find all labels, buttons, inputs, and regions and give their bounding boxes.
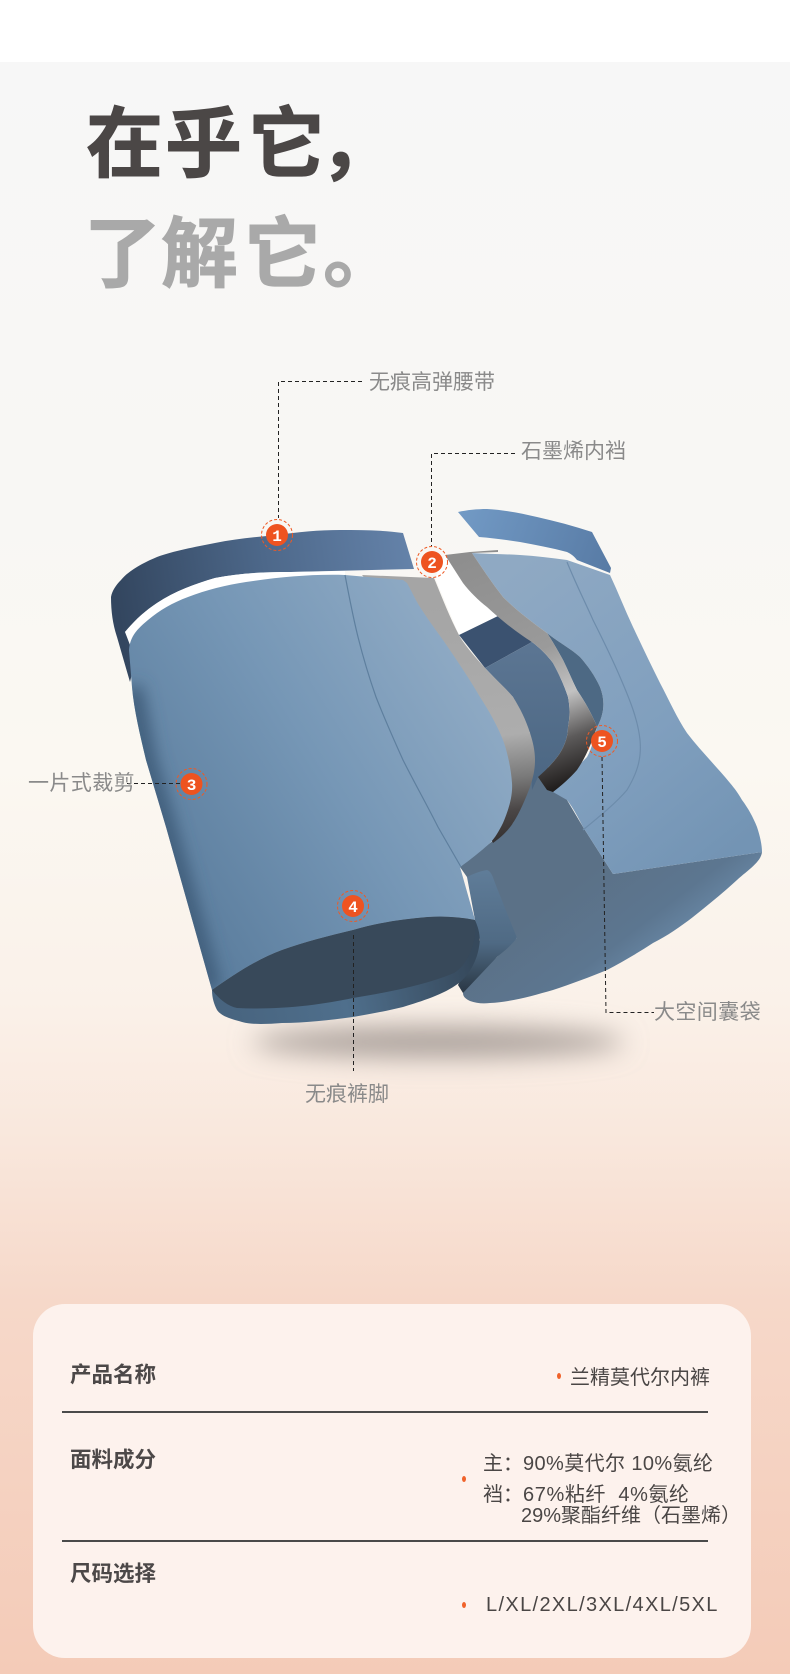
spec value: product name: 兰精莫代尔内裤 — [570, 1367, 710, 1389]
rear crotch panel — [460, 765, 762, 1003]
badge 5 — [586, 726, 618, 756]
spec label: fabric: 面料成分 — [70, 1448, 156, 1472]
callout: waistband: 无痕高弹腰带 — [369, 371, 495, 394]
callout: pouch: 大空间囊袋 — [654, 1001, 761, 1024]
panel: product specs — [33, 1304, 751, 1658]
white gap behind gusset — [435, 555, 498, 635]
badge 3 — [176, 768, 207, 800]
leg opening — [212, 917, 480, 1024]
front panel seam — [345, 575, 461, 867]
badge 1: 1 — [272, 528, 282, 546]
badge 2: 2 — [427, 555, 437, 573]
front panel — [129, 575, 512, 990]
grey lining strip — [362, 575, 535, 843]
spec value: gusset fabric: 裆：67%粘纤 4%氨纶 — [483, 1484, 690, 1506]
leader line: gusset — [432, 454, 515, 546]
gusset flap — [458, 870, 517, 993]
ground shadow — [252, 1026, 624, 1058]
rear waistband — [458, 509, 611, 573]
bullet — [462, 1476, 466, 1482]
inner pouch right section — [547, 633, 603, 727]
badge 4: 4 — [348, 899, 358, 917]
rear panel — [472, 553, 762, 874]
spec label: sizes: 尺码选择 — [70, 1562, 156, 1586]
leader line: pouch — [602, 757, 654, 1012]
callout: gusset: 石墨烯内裆 — [521, 440, 626, 463]
product diagram: boxer briefs exploded view — [111, 381, 762, 1074]
title: line two: 了解它。 — [84, 212, 400, 298]
callout: leg opening: 无痕裤脚 — [305, 1083, 389, 1106]
rear panel seam — [567, 562, 640, 830]
title: line one: 在乎它， — [86, 102, 396, 188]
bullet — [557, 1373, 561, 1379]
inner pouch panel — [485, 642, 570, 790]
spec value: sizes: L/XL/2XL/3XL/4XL/5XL — [486, 1594, 719, 1616]
leader line: one-piece cut — [127, 782, 180, 784]
graphene gusset lining — [445, 550, 597, 792]
leader line: leg opening — [352, 935, 354, 1071]
badge 2 — [416, 546, 448, 578]
bullet — [462, 1602, 466, 1608]
badge 5: 5 — [597, 734, 607, 752]
spec label: product name: 产品名称 — [70, 1363, 156, 1387]
inner navy waistband — [459, 616, 532, 668]
leader line: waistband — [278, 382, 362, 518]
white gap under waistband — [125, 571, 345, 645]
spec value: main fabric: 主：90%莫代尔 10%氨纶 — [483, 1453, 713, 1475]
badge 1 — [262, 520, 292, 550]
badge 3: 3 — [187, 777, 196, 795]
badge 4 — [338, 890, 368, 922]
callout: one-piece cut: 一片式裁剪 — [28, 772, 135, 795]
front waistband — [111, 530, 414, 682]
spec value: gusset fabric line two: 29%聚酯纤维（石墨烯） — [521, 1505, 741, 1527]
